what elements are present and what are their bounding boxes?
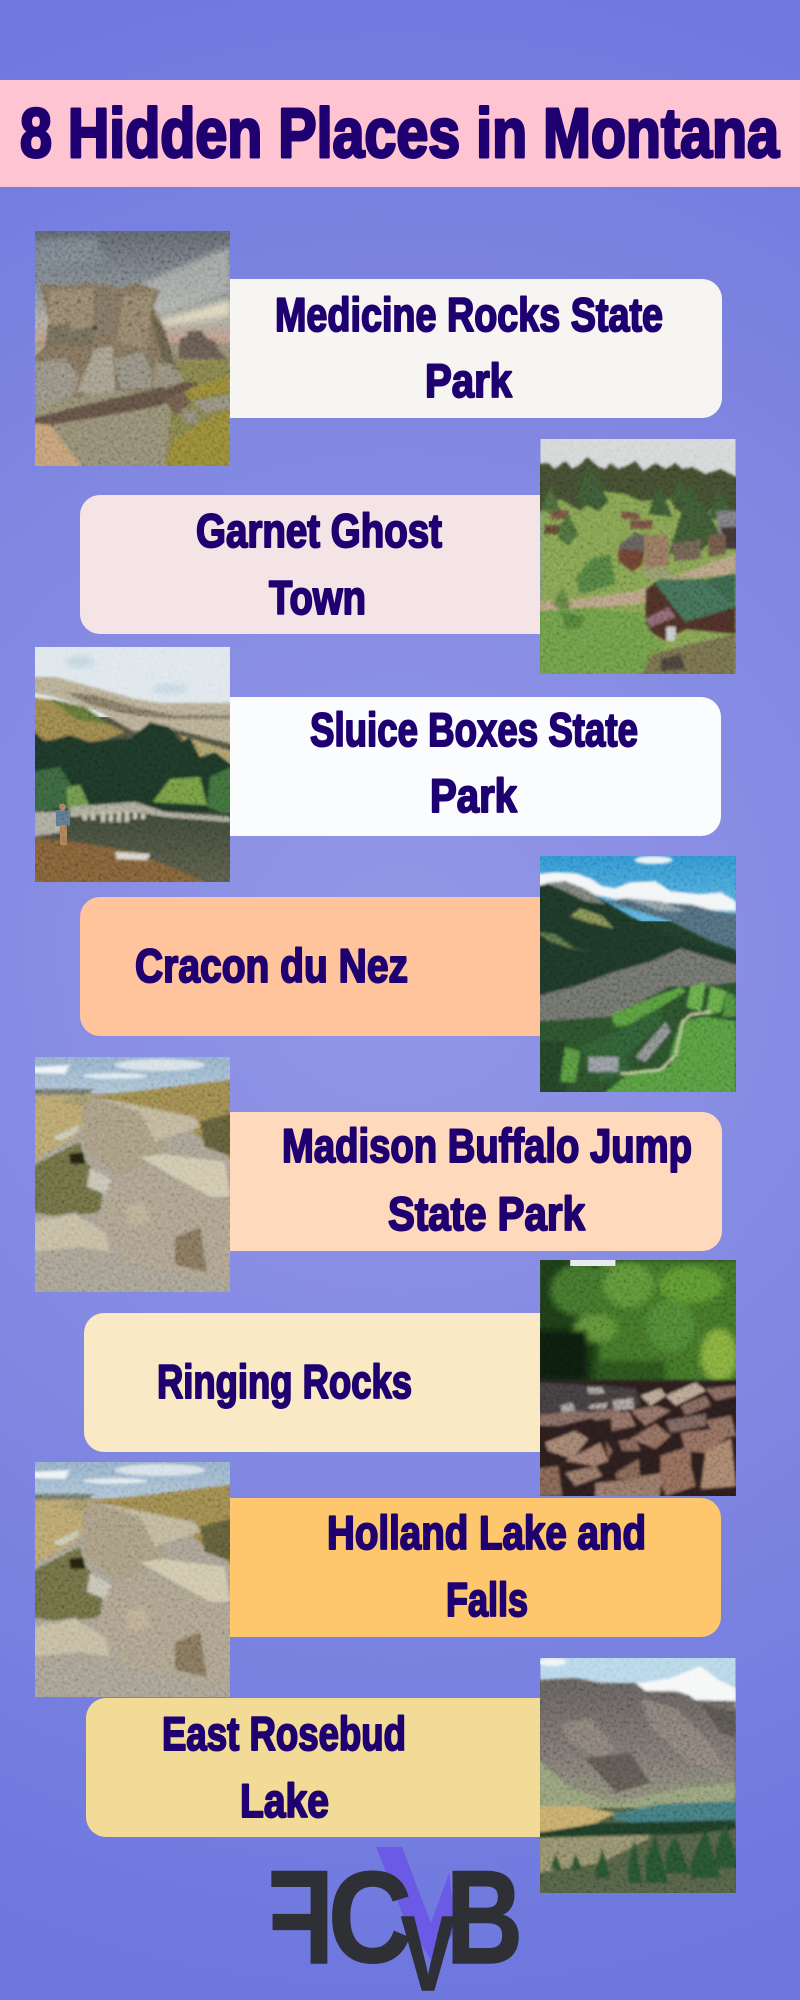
photo: mountain lake [540,1658,736,1893]
panel: Medicine Rocks State Park [30,231,722,473]
card [230,697,721,836]
card [80,897,540,1036]
panel: Madison Buffalo Jump State Park [30,1057,722,1297]
photo: rock towers at sunset [35,231,230,466]
card [86,1698,540,1837]
label: Falls [446,1573,528,1626]
panel: East Rosebud Lake [86,1658,740,1898]
panel: Ringing Rocks [84,1260,741,1501]
label: Lake [240,1774,329,1827]
label: Park [425,354,513,407]
logo letter: mirrored F: F [268,1844,334,1992]
card [230,279,722,418]
card [230,1498,721,1637]
person wading [56,804,70,845]
label: Medicine Rocks State [275,288,663,341]
label: Park [430,769,518,822]
photo: ghost town cabins in a meadow [540,439,736,674]
panel: Holland Lake and Falls [30,1462,721,1702]
label: Garnet Ghost [196,504,442,557]
photo: alpine town and golf course [540,856,736,1092]
card [80,495,540,634]
label: Sluice Boxes State [310,703,638,756]
label [162,1707,406,1827]
panel: Cracon du Nez [80,856,741,1097]
label: Cracon du Nez [135,939,408,992]
logo letter: B: B [446,1844,523,1992]
logo accent: purple V [376,1847,456,1960]
logo letter: C: C [328,1844,412,1990]
label: East Rosebud [162,1707,406,1760]
logo: FCVB [268,1844,523,2000]
photo: limestone cliff [35,1057,230,1292]
label [282,1119,692,1240]
panel: Sluice Boxes State Park [30,647,721,887]
photo: river canyon with forest [35,647,230,882]
label [327,1506,646,1626]
label: Town [269,571,366,624]
title banner [0,80,800,187]
label: State Park [388,1187,586,1240]
label: Holland Lake and [327,1506,646,1559]
card [230,1112,722,1251]
photo: boulder field below forest [540,1260,736,1496]
label [275,288,663,407]
photo: limestone cliff [35,1462,230,1697]
panel: Garnet Ghost Town [80,439,740,679]
label [196,504,442,624]
label: Ringing Rocks [157,1355,412,1408]
label: Madison Buffalo Jump [282,1119,692,1172]
label [310,703,638,822]
card [84,1313,540,1452]
